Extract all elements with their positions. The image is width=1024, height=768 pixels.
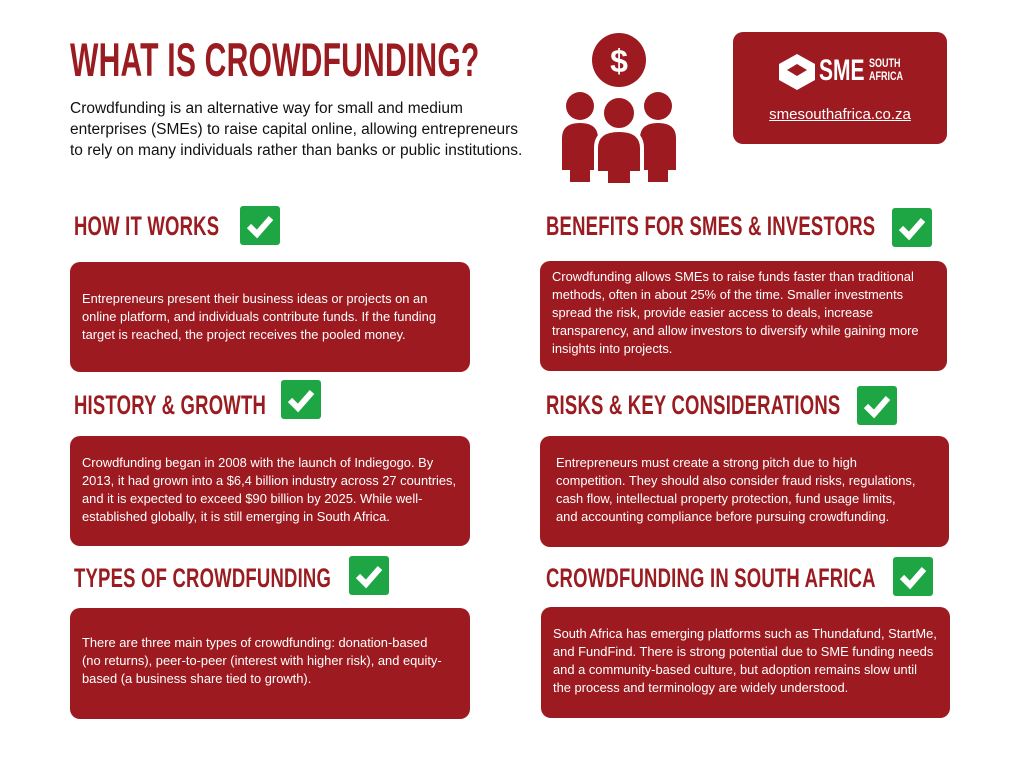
icon: check xyxy=(349,556,389,595)
icon: check xyxy=(281,380,321,419)
panel: benefits xyxy=(540,261,947,371)
heading: south africa: CROWDFUNDING IN SOUTH AFRICA xyxy=(546,563,876,593)
panel: risks: and accounting compliance before pursuing crowdfunding. xyxy=(556,509,889,524)
panel: how it works xyxy=(70,262,470,372)
logo mark xyxy=(779,54,815,90)
panel: risks: competition. They should also consider fraud risks, regulations, xyxy=(556,473,915,488)
panel: history: 2013, it had grown into a $6,4 billion industry across 27 countries, xyxy=(82,473,456,488)
panel: benefits: insights into projects. xyxy=(552,341,672,356)
panel: history xyxy=(70,436,470,546)
panel: risks: Entrepreneurs must create a strong pitch due to high xyxy=(556,455,857,470)
website link: smesouthafrica.co.za xyxy=(769,106,911,123)
icon: check xyxy=(857,386,897,425)
panel: south africa: and FundFind. There is strong potential due to SME funding needs xyxy=(553,644,933,659)
heading: types: TYPES OF CROWDFUNDING xyxy=(74,563,331,593)
heading: benefits: BENEFITS FOR SMES & INVESTORS xyxy=(546,211,875,241)
heading: history: HISTORY & GROWTH xyxy=(74,390,266,420)
title: WHAT IS CROWDFUNDING? xyxy=(70,33,480,86)
heading: how it works: HOW IT WORKS xyxy=(74,211,219,241)
panel: types: There are three main types of crowdfunding: donation-based xyxy=(82,635,427,650)
panel: history: and it is expected to exceed $90 billion by 2025. While well- xyxy=(82,491,422,506)
icon: crowd with dollar: $ xyxy=(610,43,628,79)
icon: check xyxy=(893,557,933,596)
panel: types xyxy=(70,608,470,719)
panel: south africa: and a community-based culture, but adoption remains slow until xyxy=(553,662,917,677)
intro text: Crowdfunding is an alternative way for small and medium xyxy=(70,100,463,117)
panel: benefits: spread the risk, provide easier access to deals, increase xyxy=(552,305,873,320)
intro text: enterprises (SMEs) to raise capital online, allowing entrepreneurs xyxy=(70,121,518,138)
panel: how it works: target is reached, the project receives the pooled money. xyxy=(82,327,406,342)
intro text: to rely on many individuals rather than banks or public institutions. xyxy=(70,142,522,159)
panel: benefits: Crowdfunding allows SMEs to raise funds faster than traditional xyxy=(552,269,914,284)
panel: south africa: the process and terminology are widely understood. xyxy=(553,680,848,695)
heading: risks: RISKS & KEY CONSIDERATIONS xyxy=(546,390,840,420)
icon: check xyxy=(892,208,932,247)
panel: history: Crowdfunding began in 2008 with the launch of Indiegogo. By xyxy=(82,455,433,470)
panel: how it works: online platform, and individuals contribute funds. If the funding xyxy=(82,309,436,324)
logo box: SOUTH xyxy=(869,56,900,70)
logo box: AFRICA xyxy=(869,69,903,83)
panel: history: established globally, it is still emerging in South Africa. xyxy=(82,509,390,524)
logo text: SME xyxy=(819,54,865,87)
panel: risks: cash flow, intellectual property protection, fund usage limits, xyxy=(556,491,896,506)
panel: benefits: transparency, and allow investors to diversify while gaining more xyxy=(552,323,919,338)
logo box xyxy=(733,32,947,144)
icon: check xyxy=(240,206,280,245)
panel: types: based (a business share tied to growth). xyxy=(82,671,311,686)
panel: how it works: Entrepreneurs present their business ideas or projects on an xyxy=(82,291,427,306)
icon: crowd with dollar xyxy=(562,33,676,183)
panel: benefits: methods, often in about 25% of the time. Smaller investments xyxy=(552,287,903,302)
panel: south africa: South Africa has emerging platforms such as Thundafund, StartMe, xyxy=(553,626,937,641)
panel: types: (no returns), peer-to-peer (interest with higher risk), and equity- xyxy=(82,653,442,668)
panel: risks xyxy=(540,436,949,547)
intro text xyxy=(70,100,522,159)
panel: south africa xyxy=(541,607,950,718)
